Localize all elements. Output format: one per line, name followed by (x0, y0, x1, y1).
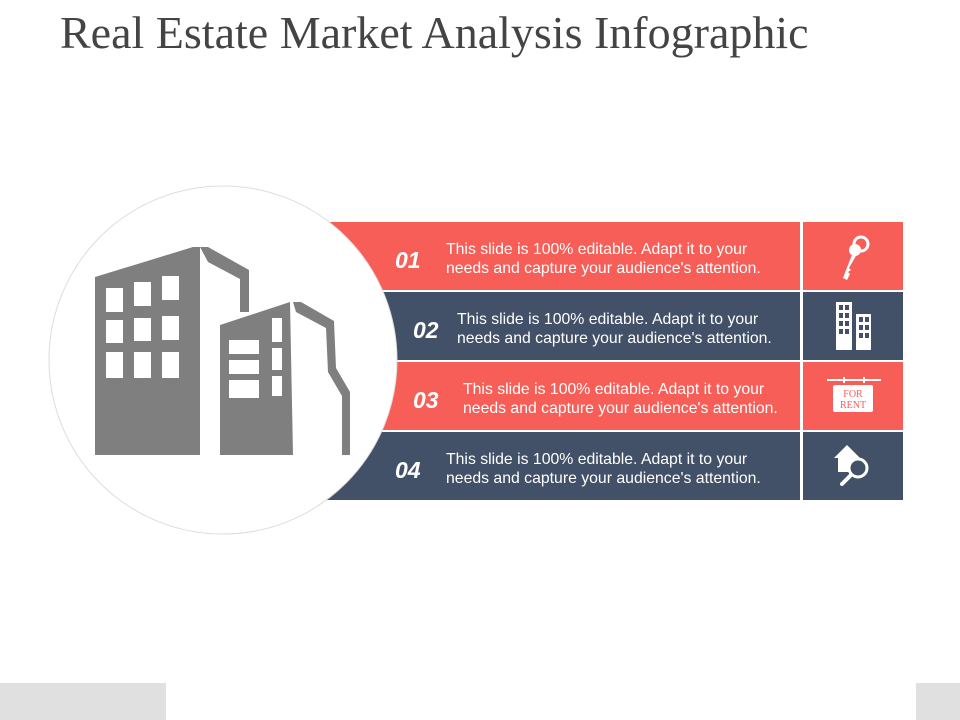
row 2: needs and capture your audience's attention. (457, 330, 772, 347)
footer blocks (0, 683, 166, 720)
row 1: This slide is 100% editable. Adapt it to your (446, 241, 747, 258)
row 1: 01 (395, 247, 421, 273)
row 1 (300, 222, 800, 290)
icon: key (803, 222, 903, 290)
row 3: 03 (413, 387, 439, 413)
row 2: This slide is 100% editable. Adapt it to your (457, 311, 758, 328)
icon: for rent sign (803, 362, 903, 430)
icon: buildings (803, 292, 903, 360)
row 4: This slide is 100% editable. Adapt it to your (446, 451, 747, 468)
row 3: This slide is 100% editable. Adapt it to your (463, 381, 764, 398)
row 2: 02 (413, 317, 439, 343)
row 4: needs and capture your audience's attention. (446, 470, 761, 487)
row 3 (300, 362, 800, 430)
row 4: 04 (395, 457, 421, 483)
row 4 (300, 432, 800, 500)
row 1: needs and capture your audience's attention. (446, 260, 761, 277)
row 2 (300, 292, 800, 360)
icon: house search (803, 432, 903, 500)
icon: for rent sign: RENT (840, 400, 866, 411)
icon: for rent sign: FOR (843, 389, 863, 400)
title: Real Estate Market Analysis Infographic (60, 7, 809, 58)
row 3: needs and capture your audience's attention. (463, 400, 778, 417)
circle with buildings (48, 186, 398, 534)
